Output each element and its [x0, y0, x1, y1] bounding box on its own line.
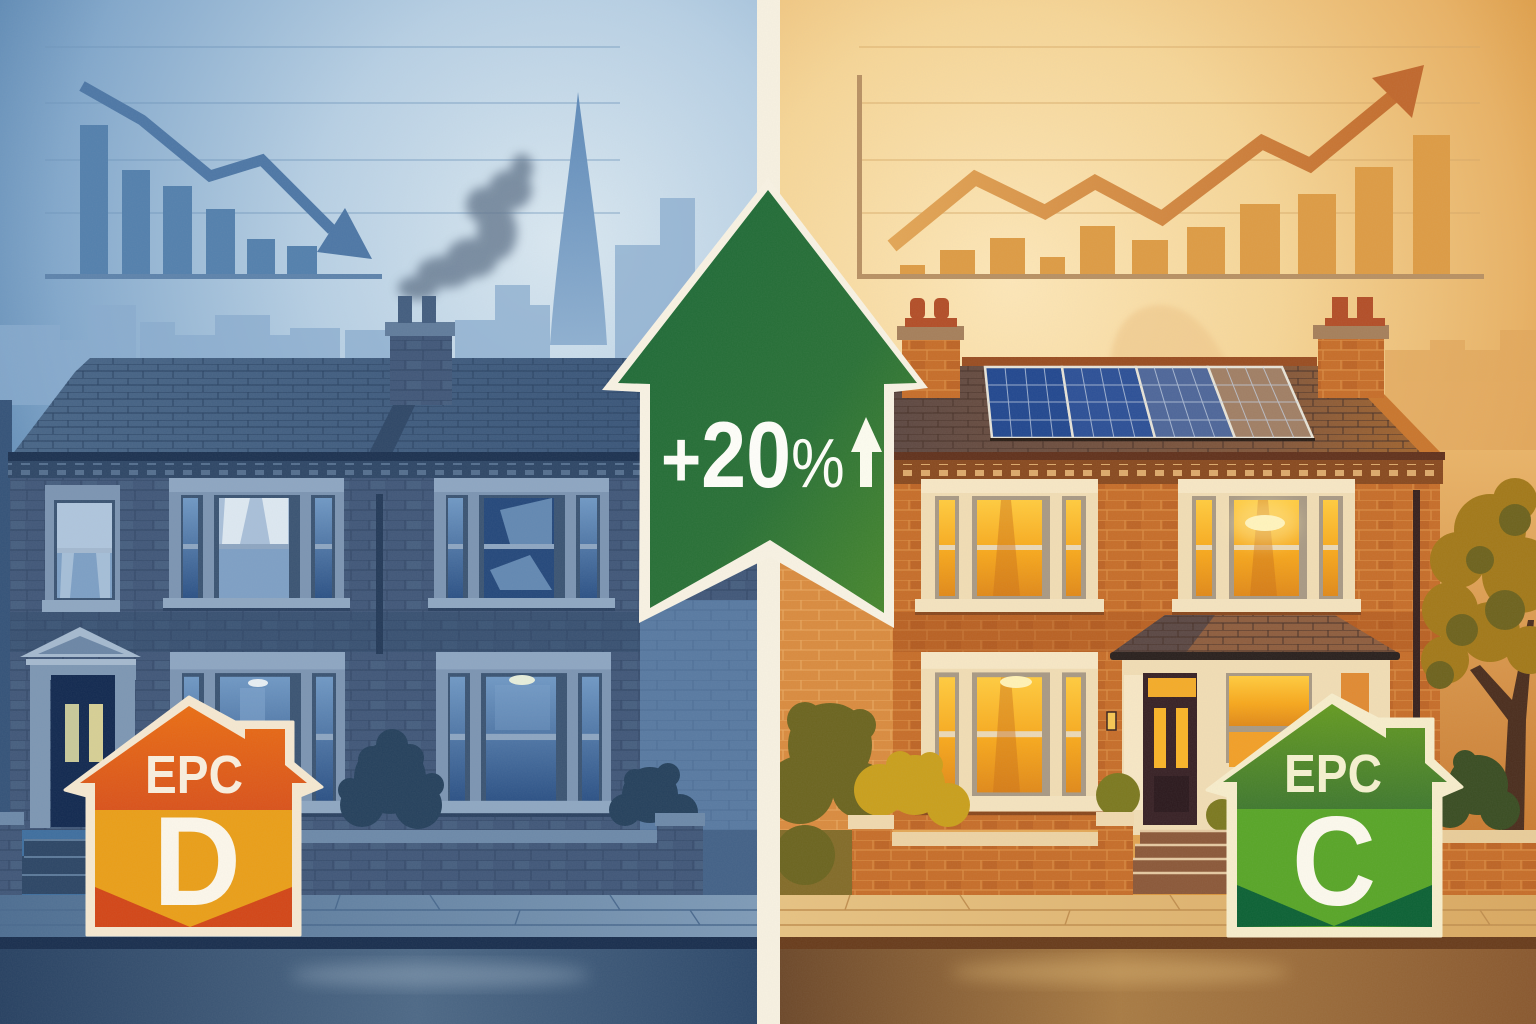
- house: terraced house, warm brick with solar panels: [766, 297, 1536, 895]
- city skyline with spire: [0, 92, 695, 405]
- steps: [1130, 830, 1228, 894]
- pavement: [0, 895, 757, 939]
- chart: rising values: [857, 47, 1484, 279]
- right chimney: [1313, 297, 1389, 398]
- road: [0, 937, 757, 1024]
- upper bay window 2: [1172, 479, 1361, 615]
- tree: [1421, 478, 1536, 830]
- cornice: [8, 452, 648, 478]
- panel: left before scene: [0, 0, 757, 1024]
- badge: EPC C: [1207, 695, 1462, 936]
- lower bay window 1: [164, 652, 351, 817]
- brick wall: [10, 465, 757, 830]
- garden wall: [0, 812, 757, 895]
- porch with bay roof and door: [1107, 615, 1400, 835]
- label D: D: [153, 790, 241, 932]
- side background beside house: [1440, 450, 1536, 850]
- roof: [893, 366, 1440, 465]
- panel: right after scene: [766, 0, 1536, 1024]
- upper bay window 1: [163, 478, 350, 611]
- upper bay window 2: [428, 478, 615, 611]
- icon: small up arrow: [851, 417, 882, 487]
- house: terraced house, dull blue: [0, 296, 757, 895]
- label EPC: EPC: [1284, 744, 1382, 804]
- brick wall: [893, 465, 1440, 830]
- roof: [8, 358, 757, 465]
- label EPC: EPC: [145, 745, 243, 805]
- label +20%: +20%: [661, 402, 845, 507]
- skyline and distant tree: [1110, 305, 1536, 460]
- left sky background: [0, 0, 757, 1024]
- arrow: downward trend: [82, 86, 372, 259]
- upper bay window 1: [915, 479, 1104, 615]
- porch and door: [20, 627, 141, 828]
- garden wall: [848, 812, 1536, 895]
- bushes and shrubs: [766, 702, 1520, 895]
- pavement: [780, 895, 1536, 939]
- cornice: [893, 452, 1445, 484]
- road: [780, 937, 1536, 1024]
- solar panels: [985, 367, 1313, 438]
- lower bay window 1: [915, 652, 1104, 815]
- label C: C: [1292, 790, 1376, 932]
- arrow: upward trend: [892, 65, 1424, 246]
- lower bay window 2: [430, 652, 617, 817]
- downpipe: [1413, 490, 1420, 830]
- small upper window: [42, 485, 120, 612]
- centre divider: [757, 0, 780, 1024]
- badge: EPC D: [65, 697, 322, 935]
- chimney smoke: [398, 154, 533, 300]
- left chimney: [897, 298, 964, 398]
- central arrow: +20% value uplift: [602, 178, 928, 628]
- chimney: [385, 296, 455, 405]
- right sky background: [780, 0, 1536, 1024]
- bushes: [338, 729, 698, 830]
- downpipe: [376, 494, 383, 654]
- chart: falling values: [45, 47, 620, 279]
- steps: [18, 840, 86, 894]
- edge of adjoining building: [0, 400, 12, 820]
